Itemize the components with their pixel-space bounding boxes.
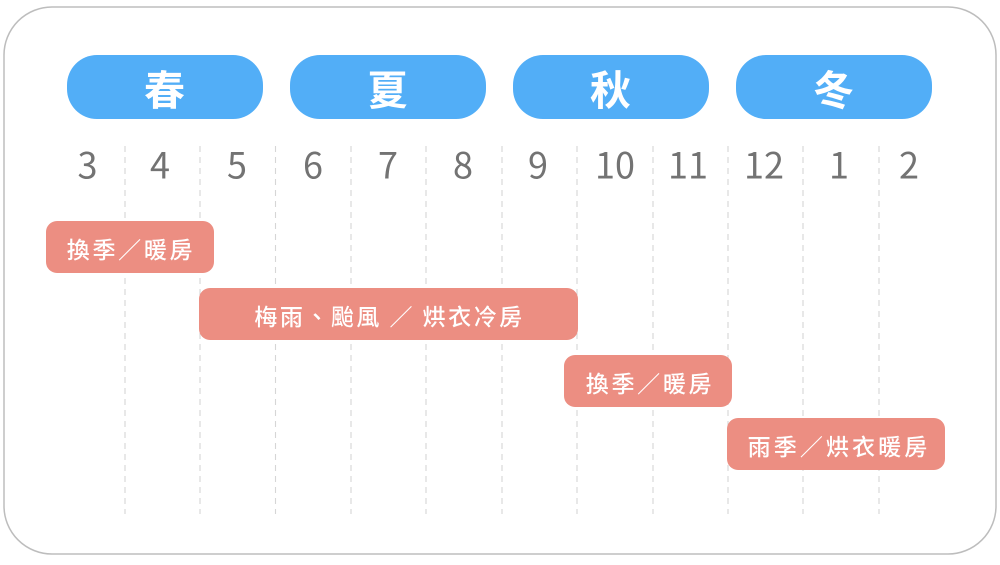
season: spring: 春: [144, 57, 185, 117]
bar: winter rainy season drying heating: 雨季／烘衣暖房: [748, 428, 930, 462]
month labels: 2: [899, 138, 919, 190]
season: summer: [290, 55, 486, 119]
season: spring: [67, 55, 263, 119]
season: autumn: 秋: [590, 57, 631, 117]
bar: plum rain and typhoon drying cooling: 梅雨、颱風 ／ 烘衣冷房: [254, 298, 525, 332]
month labels: 5: [227, 138, 247, 190]
month labels: 4: [150, 138, 170, 190]
month labels: 10: [595, 138, 635, 190]
season: winter: 冬: [813, 57, 854, 117]
bar: autumn season change heating: [564, 355, 732, 407]
bar: autumn season change heating: 換季／暖房: [586, 365, 714, 399]
month labels: 8: [453, 138, 473, 190]
month labels: [78, 138, 919, 190]
bar: spring season change heating: [46, 221, 214, 273]
season headers: [67, 55, 932, 119]
bar: plum rain and typhoon drying cooling: [199, 288, 578, 340]
month labels: 1: [829, 138, 849, 190]
season: winter: [736, 55, 932, 119]
month labels: 11: [668, 138, 708, 190]
month labels: 9: [528, 138, 548, 190]
bar: winter rainy season drying heating: [727, 418, 945, 470]
bar: spring season change heating: 換季／暖房: [67, 231, 195, 265]
month labels: 3: [78, 138, 97, 190]
season: autumn: [513, 55, 709, 119]
month labels: 6: [303, 138, 323, 190]
month labels: 12: [744, 138, 784, 190]
month labels: 7: [378, 138, 398, 190]
season: summer: 夏: [367, 57, 408, 117]
